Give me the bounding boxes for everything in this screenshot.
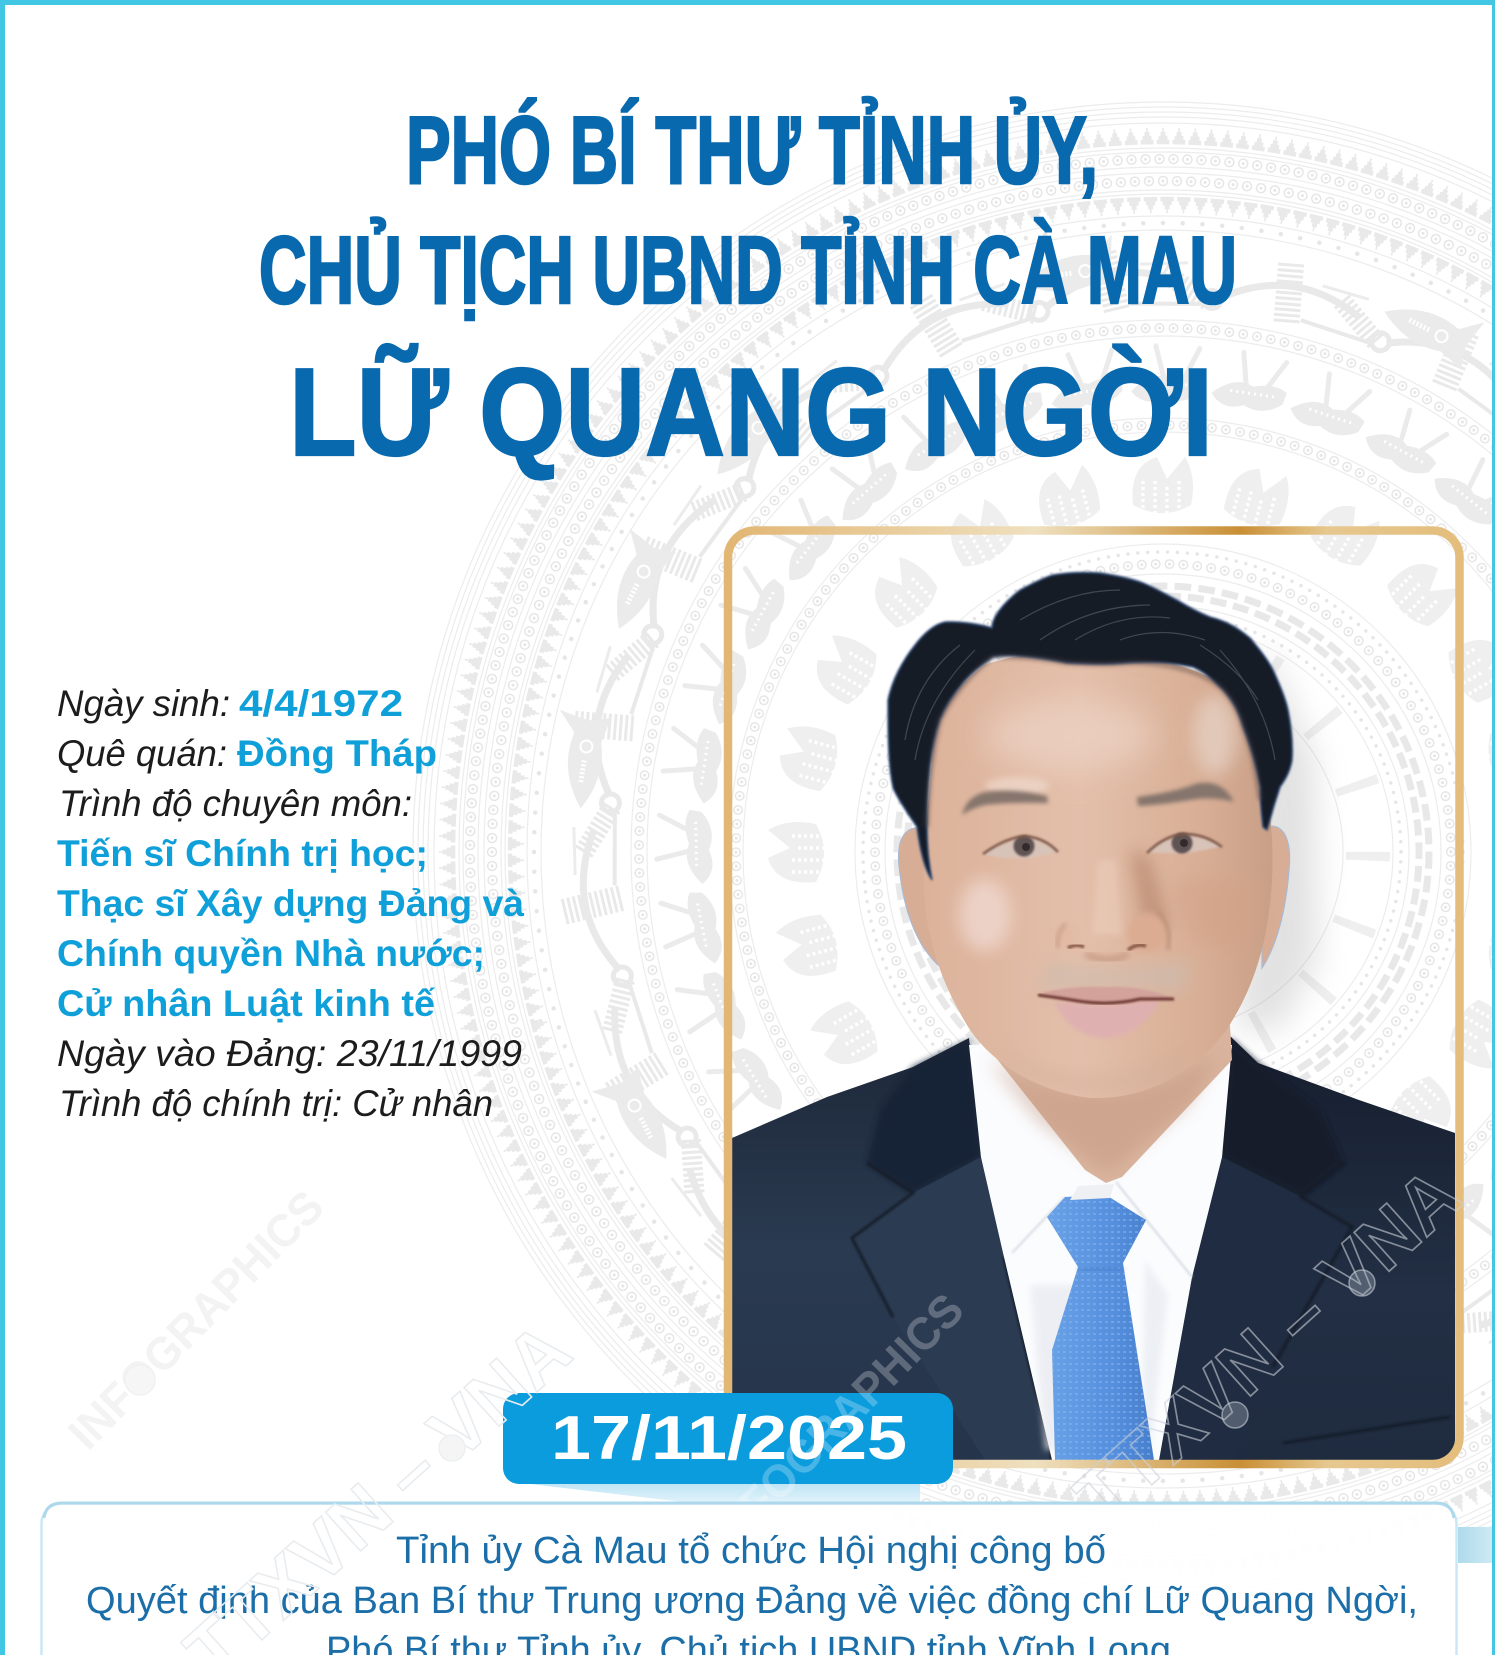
nose [1054,912,1169,960]
watermark: news agency over photo: TTXVN – VNA [1059,1152,1477,1540]
biography details: Ngày vào Đảng: 23/11/1999 [57,1033,522,1074]
mouth [1038,987,1174,1038]
biography details: Chính quyền Nhà nước; [57,933,485,974]
watermark: infographics left: INFOGRAPHICS [58,1180,333,1459]
title [259,96,1237,482]
announcement text [86,1530,1418,1655]
date badge: 17/11/2025 [551,1404,907,1473]
facial shading [959,695,1262,1093]
biography details: Thạc sĩ Xây dựng Đảng và [57,883,524,924]
drum figures: deer [656,345,1495,1342]
ears [899,826,1290,968]
date badge [503,1393,953,1484]
title: LỮ QUANG NGỜI [289,344,1213,482]
biography details: Cử nhân Luật kinh tế [57,983,435,1024]
eyes [983,832,1222,858]
portrait photo [732,572,1455,1460]
biography details: Tiến sĩ Chính trị học; [57,833,428,874]
biography details: Trình độ chính trị: Cử nhân [59,1083,493,1124]
right ribbon fold [1458,1527,1492,1563]
hair [888,572,1292,880]
drum figures: houses and boats [768,457,1495,1241]
drum figures: cranes and fish-birds [539,228,1495,1476]
announcement text: Quyết định của Ban Bí thư Trung ương Đảng về việc đồng chí Lữ Quang Ngời, [86,1580,1418,1622]
biography details: Đồng Tháp [237,733,437,774]
biography details: Ngày sinh: [57,683,230,724]
necktie [1047,1184,1154,1460]
eyebrows [962,783,1234,815]
neck [974,1025,1232,1183]
biography details [57,683,524,1124]
watermark: infographics over photo: INFOGRAPHICS [698,1283,973,1562]
gold portrait frame [728,530,1460,1464]
date ribbon fold [530,1484,920,1504]
biography details: Trình độ chuyên môn: [59,783,412,824]
announcement panel [42,1503,1456,1655]
bronze drum background pattern [413,102,1495,1602]
soft shadow behind head [1235,640,1318,1030]
suit jacket [732,1036,1455,1460]
title: PHÓ BÍ THƯ TỈNH ỦY, [406,96,1098,204]
shirt [969,1045,1232,1460]
biography details: 4/4/1972 [239,683,403,724]
announcement text: Tỉnh ủy Cà Mau tổ chức Hội nghị công bố [396,1530,1106,1572]
face [924,652,1273,1098]
biography details: Quê quán: [57,733,227,774]
